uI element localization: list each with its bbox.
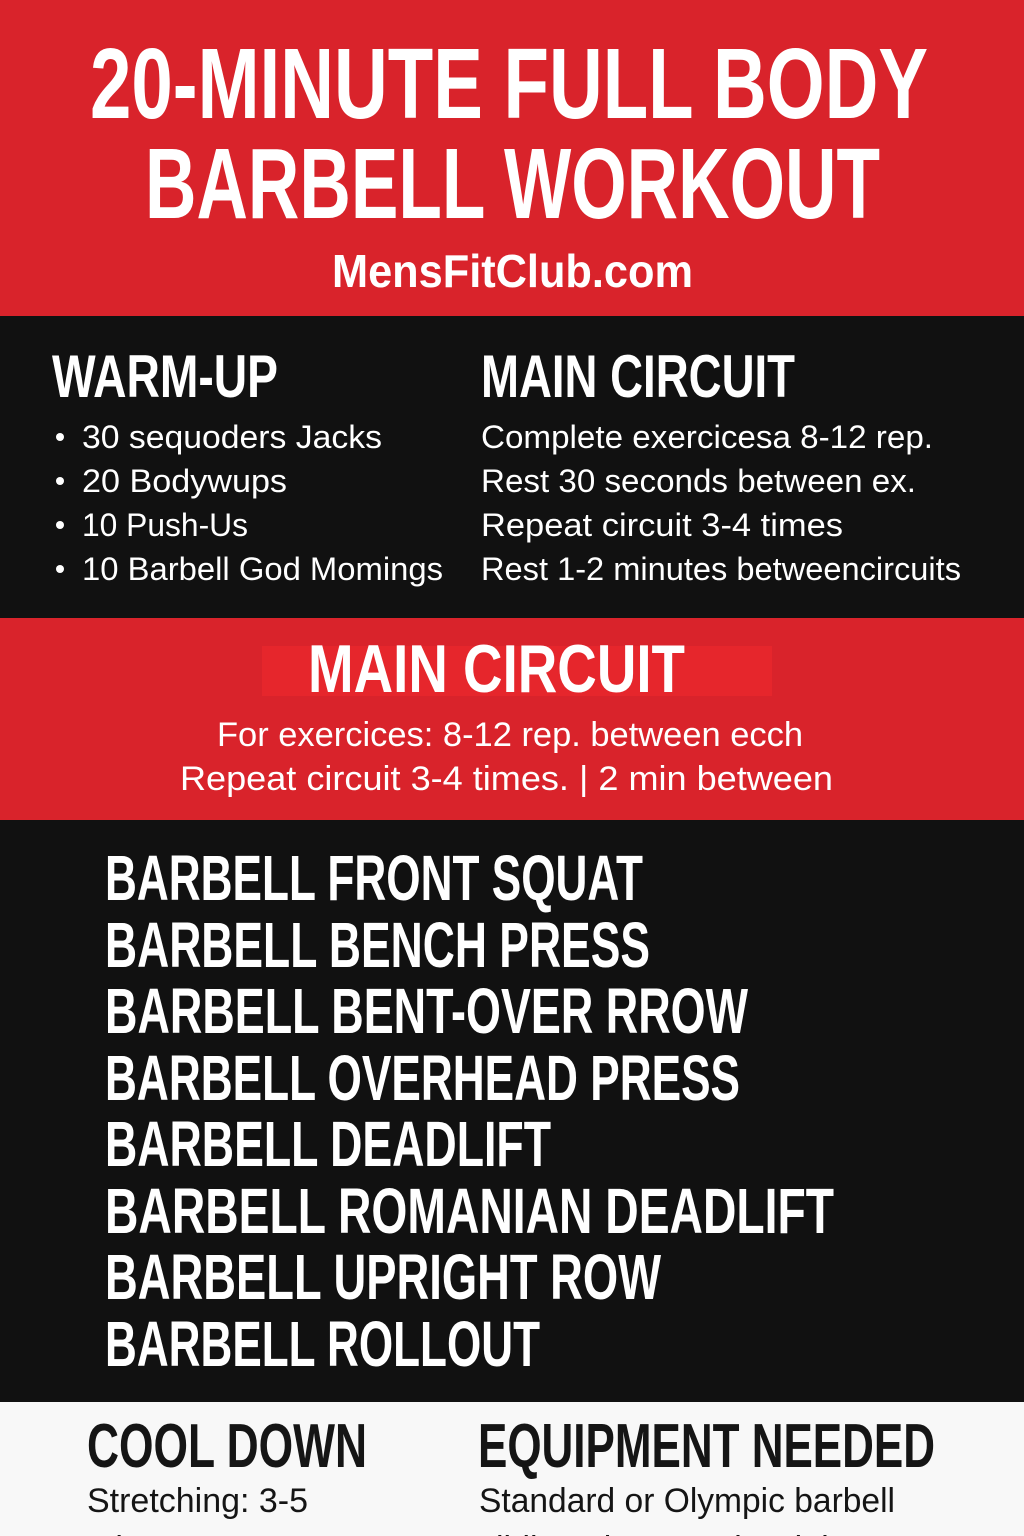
- main circuit instructions: Rest 30 seconds between ex.: [481, 463, 916, 499]
- panel: exercise list: BARBELL BENT-OVER RROW: [105, 975, 748, 1047]
- banner heading: MAIN CIRCUIT: [308, 631, 685, 707]
- panel: warm-up and main circuit: [0, 316, 1024, 618]
- banner text: Repeat circuit 3-4 times. | 2 min between: [180, 760, 833, 798]
- warm-up list: [56, 419, 443, 587]
- panel: exercise list: BARBELL FRONT SQUAT: [105, 842, 643, 914]
- warm-up list: 10 Barbell God Momings: [82, 551, 443, 587]
- heading: cool down: COOL DOWN: [87, 1412, 367, 1481]
- main circuit instructions: Rest 1-2 minutes betweencircuits: [481, 551, 961, 587]
- panel: exercise list: BARBELL OVERHEAD PRESS: [105, 1042, 740, 1114]
- title: [90, 28, 928, 240]
- panel: exercise list: [0, 820, 1024, 1402]
- panel: exercise list: BARBELL BENCH PRESS: [105, 909, 650, 981]
- equipment text: Standard or Olympic barbell: [479, 1482, 895, 1520]
- heading: warm-up: WARM-UP: [52, 343, 278, 410]
- cool down text: Stretching: 3-5: [87, 1482, 308, 1520]
- warm-up list: 20 Bodywups: [82, 463, 287, 499]
- panel: main circuit banner: [0, 618, 1024, 820]
- panel: exercise list: BARBELL DEADLIFT: [105, 1108, 551, 1180]
- heading: main circuit: MAIN CIRCUIT: [481, 343, 795, 410]
- main circuit instructions: [481, 419, 961, 587]
- main circuit instructions: Complete exercicesa 8-12 rep.: [481, 419, 933, 455]
- warm-up list: 30 sequoders Jacks: [82, 419, 382, 455]
- panel: cool down and equipment: [0, 1402, 1024, 1536]
- panel: exercise list: BARBELL ROLLOUT: [105, 1308, 540, 1380]
- banner text: [180, 716, 833, 798]
- warm-up list: 10 Push-Us: [82, 507, 248, 543]
- banner text: For exercices: 8-12 rep. between ecch: [217, 716, 803, 754]
- panel: exercise list: BARBELL UPRIGHT ROW: [105, 1241, 661, 1313]
- header panel: [0, 0, 1024, 316]
- subtitle: website: MensFitClub.com: [332, 245, 693, 297]
- main circuit instructions: Repeat circuit 3-4 times: [481, 507, 843, 543]
